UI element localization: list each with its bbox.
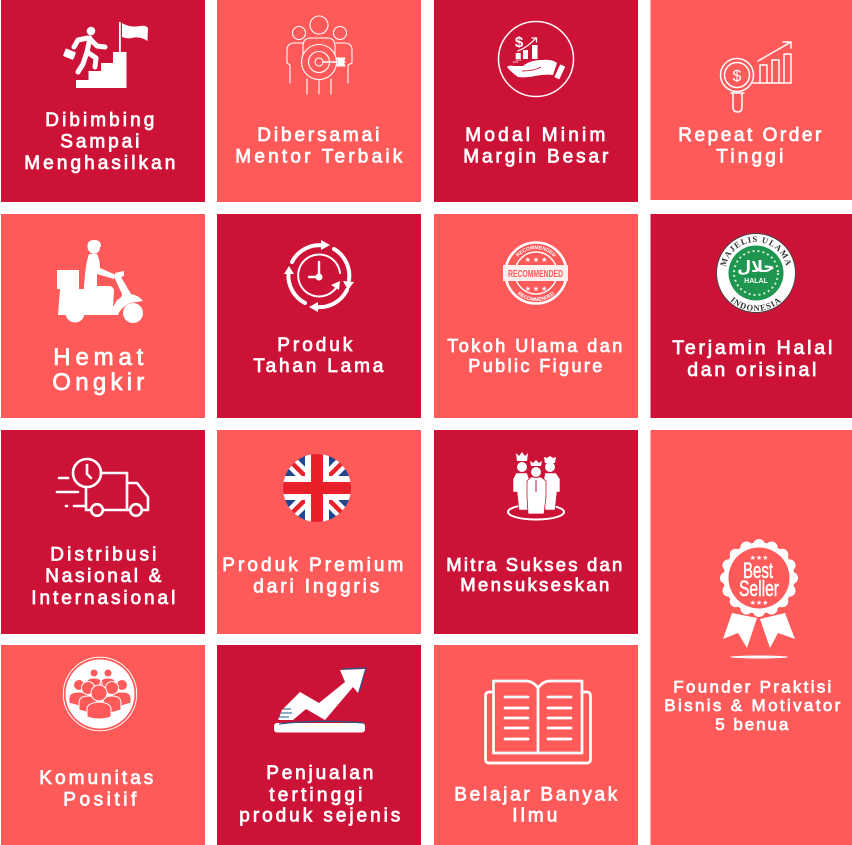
heading: Bisnis & Motivator: [664, 696, 841, 715]
heading: [235, 125, 403, 168]
heading: Komunitas: [39, 768, 153, 789]
heading: Distribusi: [50, 545, 156, 566]
panel: Tokoh Ulama dan Public Figure: [434, 214, 638, 418]
panel: Terjamin Halal dan orisinal: [650, 214, 852, 418]
icon: halal MUI seal: [716, 233, 796, 313]
heading: Penjualan: [266, 763, 373, 784]
icon: best seller rosette: ★★★: [750, 599, 768, 607]
icon: hand holding money growth: [498, 22, 574, 96]
panel: Mitra Sukses dan Mensukseskan: [434, 430, 638, 634]
icon: recommended stamp: RECOMMENDED: [508, 268, 563, 280]
heading: [664, 678, 841, 734]
heading: Hemat: [53, 344, 144, 371]
heading: Ongkir: [52, 369, 144, 396]
panel: Dibimbing Sampai Menghasilkan: [1, 0, 205, 202]
heading: Ilmu: [512, 806, 557, 827]
icon: halal MUI seal: INDONESIA: [730, 296, 782, 312]
heading: [24, 110, 175, 174]
panel: Modal Minim Margin Besar: [434, 0, 638, 202]
icon: delivery scooter: [57, 240, 143, 323]
panel: Dibersamai Mentor Terbaik: [217, 0, 421, 202]
panel: Hemat Ongkir: [1, 214, 205, 418]
heading: [239, 763, 400, 827]
heading: Mentor Terbaik: [235, 147, 403, 168]
heading: [454, 785, 618, 827]
panel: Belajar Banyak Ilmu: [434, 645, 638, 845]
heading: [678, 125, 822, 168]
icon: magnifier with growth chart: [720, 42, 791, 112]
heading: 5 benua: [715, 715, 789, 734]
heading: [52, 344, 144, 396]
panel: Komunitas Positif: [1, 645, 205, 845]
heading: Modal Minim: [465, 125, 605, 146]
icon: halal MUI seal: حلال: [737, 257, 775, 276]
icon: hand holding money growth: $: [515, 34, 524, 51]
heading: [222, 555, 403, 598]
heading: Dibimbing: [45, 110, 154, 131]
icon: best seller rosette: ★★★: [750, 554, 768, 562]
icon: recommended stamp: ★ ★ ★: [525, 256, 547, 264]
heading: Menghasilkan: [24, 153, 175, 174]
heading: Nasional &: [45, 566, 162, 587]
icon: clock with circular arrows: [284, 240, 354, 312]
heading: [31, 545, 175, 609]
heading: Dibersamai: [257, 125, 379, 146]
heading: produk sejenis: [239, 806, 400, 827]
icon: delivery truck with clock: [57, 459, 148, 516]
icon: recommended stamp: ★ ★ ★: [525, 285, 547, 293]
heading: Public Figure: [468, 356, 602, 376]
heading: Produk: [277, 335, 353, 356]
heading: dan orisinal: [687, 359, 816, 381]
heading: Repeat Order: [678, 125, 822, 146]
heading: [446, 554, 622, 595]
heading: [447, 336, 622, 376]
heading: [672, 337, 832, 381]
icon: best seller rosette: Best: [743, 558, 773, 583]
icon: recommended stamp: RECOMMENDED: [518, 292, 554, 301]
heading: [253, 335, 384, 377]
panel: Repeat Order Tinggi: [650, 0, 852, 200]
icon: magnifier with growth chart: $: [733, 68, 742, 85]
icon: open book: [486, 681, 590, 763]
icon: recommended stamp: [503, 241, 568, 305]
icon: team with target: [287, 16, 352, 94]
icon: best seller rosette: [720, 539, 798, 658]
heading: Tinggi: [716, 147, 783, 168]
heading: dari Inggris: [253, 577, 379, 598]
icon: community group in circle: [63, 657, 137, 731]
heading: [463, 125, 609, 168]
icon: halal MUI seal: MAJELIS ULAMA: [720, 236, 791, 267]
heading: tertinggi: [269, 785, 362, 806]
icon: recommended stamp: RECOMMENDED: [516, 246, 556, 257]
icon: three crowned business people: [508, 452, 564, 520]
heading: Founder Praktisi: [673, 678, 831, 697]
panel: Penjualan tertinggi produk sejenis: [217, 645, 421, 845]
panel: Produk Tahan Lama: [217, 214, 421, 418]
heading: Produk Premium: [222, 555, 403, 576]
panel: Produk Premium dari Inggris: [217, 430, 421, 634]
heading: Mitra Sukses dan: [446, 554, 622, 575]
icon: UK flag circle: [283, 454, 351, 522]
heading: [39, 768, 153, 811]
panel: Founder Praktisi Bisnis & Motivator 5 benua: [650, 430, 852, 845]
panel: Distribusi Nasional & Internasional: [1, 430, 205, 634]
icon: rising arrow chart: [274, 668, 366, 732]
heading: Tahan Lama: [253, 356, 384, 377]
heading: Positif: [63, 790, 137, 811]
heading: Terjamin Halal: [672, 337, 832, 359]
heading: Margin Besar: [463, 147, 609, 168]
heading: Internasional: [31, 588, 175, 609]
heading: Tokoh Ulama dan: [447, 336, 622, 356]
heading: Mensukseskan: [460, 574, 609, 595]
icon: best seller rosette: Seller: [739, 576, 779, 601]
heading: Sampai: [60, 132, 139, 152]
icon: halal MUI seal: HALAL: [744, 278, 769, 285]
heading: Belajar Banyak: [454, 785, 618, 806]
icon: man climbing stairs to flag: [63, 22, 148, 88]
